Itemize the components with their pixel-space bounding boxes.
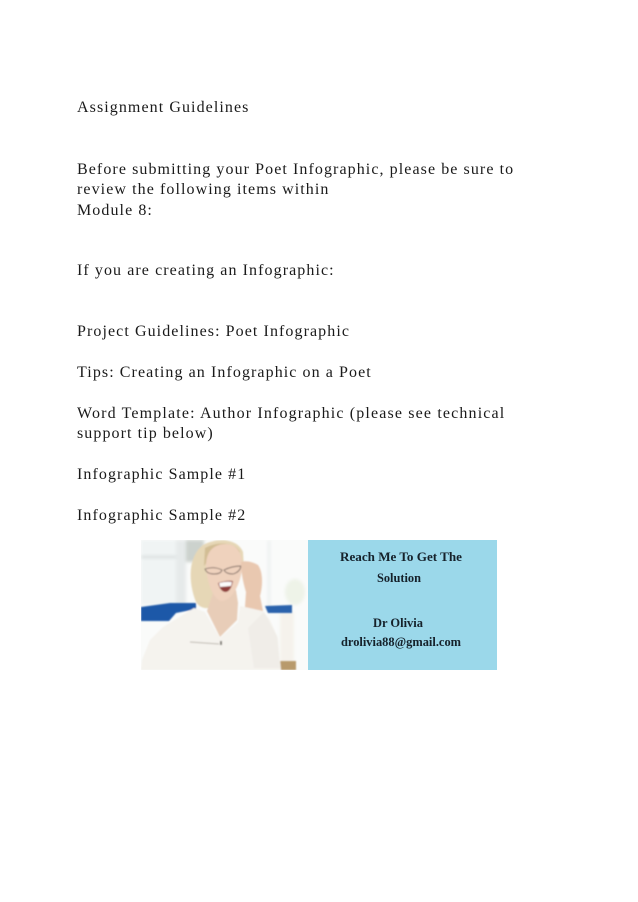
photo: smiling woman with glasses bbox=[141, 540, 308, 670]
text: solution: Solution bbox=[377, 571, 421, 585]
list item: tips: Tips: Creating an Infographic on a Poet bbox=[77, 364, 372, 381]
text block: introduction: Before submitting your Poet Infographic, please be sure to bbox=[77, 161, 514, 178]
list item: sample 2: Infographic Sample #2 bbox=[77, 507, 246, 524]
panel: contact details bbox=[308, 540, 497, 670]
list item: word template bbox=[77, 405, 505, 442]
list item: word template: support tip below) bbox=[77, 425, 214, 442]
list item: sample 1: Infographic Sample #1 bbox=[77, 466, 246, 483]
neck and chest bbox=[207, 590, 238, 637]
blue furniture bbox=[141, 603, 196, 621]
heading: assignment guidelines: Assignment Guidelines bbox=[77, 99, 249, 116]
list item: project guidelines: Project Guidelines: Poet Infographic bbox=[77, 323, 350, 340]
text block: introduction: review the following items within bbox=[77, 181, 330, 198]
mouth bbox=[218, 581, 233, 592]
hand bbox=[241, 561, 263, 611]
text block: infographic condition: If you are creating an Infographic: bbox=[77, 262, 335, 279]
text: name: Dr Olivia bbox=[373, 616, 424, 630]
hair bbox=[191, 540, 244, 608]
contact banner bbox=[141, 540, 497, 670]
text block: introduction bbox=[77, 161, 514, 219]
text: call to action: Reach Me To Get The bbox=[340, 550, 462, 564]
list item: word template: Word Template: Author Infographic (please see technical bbox=[77, 405, 505, 422]
face bbox=[206, 544, 242, 601]
glasses bbox=[205, 566, 241, 574]
text: email: drolivia88@gmail.com bbox=[341, 635, 462, 649]
text block: introduction: Module 8: bbox=[77, 202, 153, 219]
shirt bbox=[141, 606, 281, 670]
